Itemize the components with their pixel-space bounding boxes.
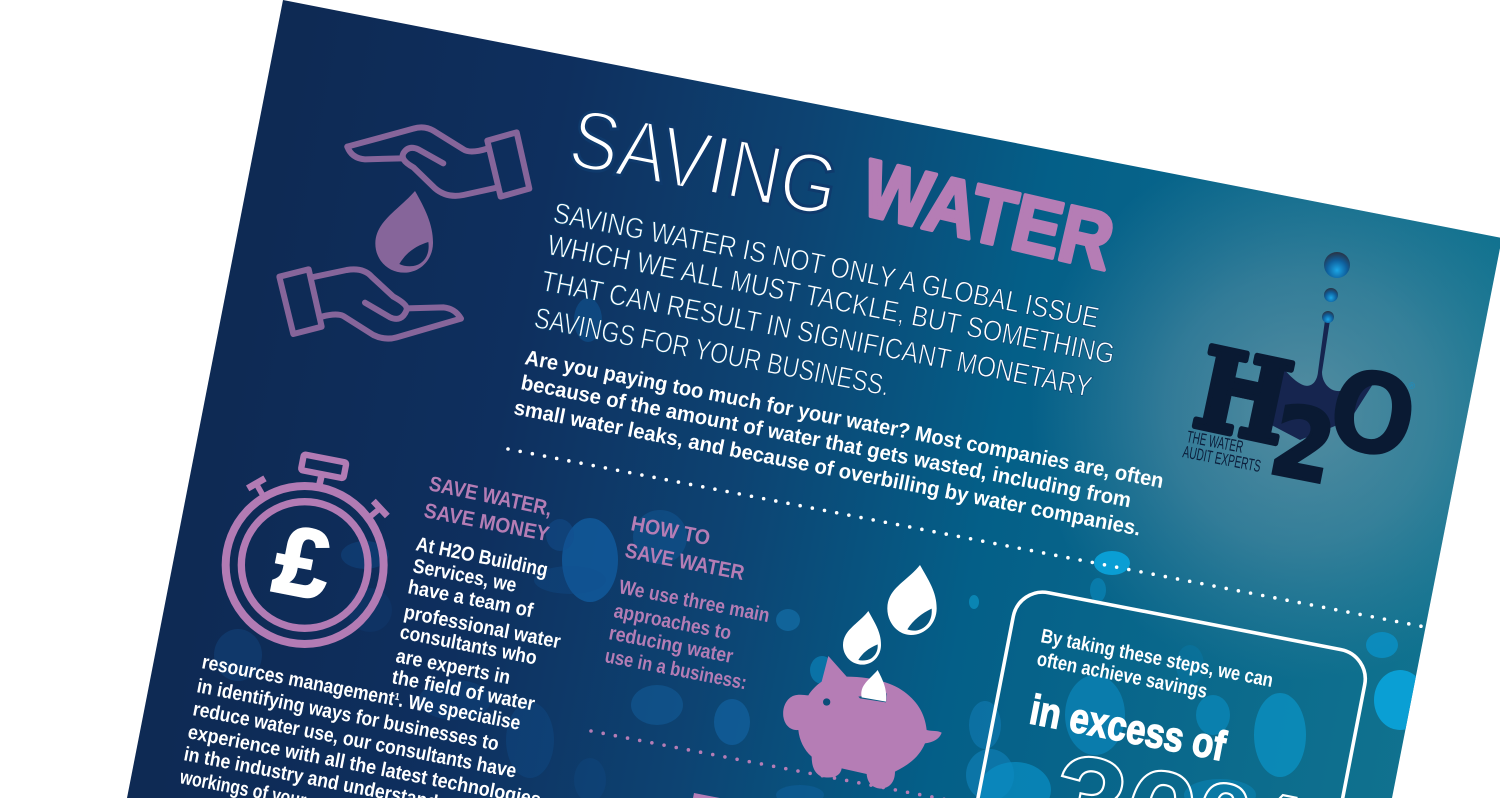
heading: save water, save money: SAVE MONEY	[422, 499, 551, 546]
dotted divider: white	[508, 449, 1425, 627]
intro heading text: SAVINGS FOR YOUR BUSINESS.	[532, 302, 892, 403]
text block: about H2O Building Services: in identifying ways for businesses to	[195, 675, 501, 755]
medium drop	[843, 611, 881, 665]
heading cut off at bottom edge	[691, 793, 733, 798]
callout intro text: often achieve savings	[1035, 648, 1209, 703]
icon: piggy bank with water drops	[783, 565, 942, 789]
intro bold paragraph: Are you paying too much for your water? Most companies are, often	[523, 346, 1165, 493]
text block: about H2O Building Services	[177, 533, 563, 798]
text block: three approaches: reducing water	[607, 622, 735, 668]
icon part: lower hand	[279, 269, 461, 339]
title	[563, 90, 1122, 287]
intro bold paragraph: because of the amount of water that gets wasted, including from	[519, 371, 1133, 512]
logo strapline: THE WATER	[1185, 427, 1245, 457]
callout intro text: By taking these steps, we can	[1039, 625, 1275, 692]
text block: three approaches: We use three main	[617, 576, 771, 627]
text block: three approaches: use in a business:	[603, 645, 749, 694]
water droplet background pattern	[214, 298, 1426, 798]
icon part: water drop	[375, 191, 433, 273]
text block: about H2O Building Services: . We specialise	[397, 690, 522, 735]
icon: stopwatch with pound sign	[226, 454, 387, 644]
title: SAVING	[563, 90, 846, 234]
callout: in excess of: in excess of	[1026, 686, 1230, 770]
intro heading text: THAT CAN RESULT IN SIGNIFICANT MONETARY	[539, 265, 1094, 404]
text block: three approaches: approaches to	[612, 600, 733, 645]
text block: about H2O Building Services: are experts in	[394, 645, 512, 689]
logo strapline: AUDIT EXPERTS	[1181, 442, 1262, 476]
logo strapline	[1181, 427, 1262, 476]
logo: H2O The Water Audit Experts: H	[1184, 323, 1302, 471]
text block: about H2O Building Services: professional water	[402, 601, 563, 653]
heading: how to save water: SAVE WATER	[623, 539, 746, 585]
text block: three approaches	[603, 576, 771, 694]
text block: about H2O Building Services: resources management	[200, 651, 425, 716]
registered mark: ®	[1408, 380, 1416, 391]
text block: about H2O Building Services: have a team of	[406, 576, 535, 622]
intro bold paragraph: small water leaks, and because of overbilling by water companies.	[512, 396, 1143, 541]
dotted divider: pink	[591, 731, 1020, 798]
coin slot	[858, 693, 887, 702]
heading: save water, save money: SAVE WATER,	[427, 472, 554, 521]
heading: how to save water	[623, 512, 746, 585]
logo: H2O The Water Audit Experts: O	[1318, 343, 1427, 487]
drop entering slot	[861, 670, 886, 702]
large drop	[887, 565, 937, 635]
heading: how to save water: HOW TO	[629, 512, 712, 550]
logo: H2O The Water Audit Experts: 2	[1261, 384, 1344, 507]
text block: about H2O Building Services: consultants who	[398, 621, 539, 669]
pound sign: £	[266, 505, 339, 621]
intro heading text	[532, 197, 1117, 404]
piggy eye	[823, 698, 830, 706]
logo letters	[1216, 374, 1279, 405]
intro heading text: WHICH WE ALL MUST TACKLE, BUT SOMETHING	[545, 229, 1117, 371]
title: WATER	[854, 143, 1122, 287]
icon part: upper hand	[347, 127, 529, 197]
text block: about H2O Building Services: Services, we	[411, 555, 518, 597]
intro heading text: SAVING WATER IS NOT ONLY A GLOBAL ISSUE	[551, 197, 1102, 335]
heading: save water, save money	[422, 472, 554, 546]
logo: H2O The Water Audit Experts	[1181, 252, 1427, 507]
piggy bank	[783, 656, 942, 789]
text block: about H2O Building Services: 1	[394, 692, 401, 703]
icon: hands protecting a water drop	[279, 127, 529, 339]
text block: about H2O Building Services: At H2O Building	[414, 533, 550, 582]
logo water drops	[1322, 252, 1350, 323]
text block: about H2O Building Services: reduce water use, our consultants have	[191, 698, 518, 783]
text block: about H2O Building Services: the field of water	[390, 666, 537, 716]
logo blob connecting letters	[1262, 320, 1380, 440]
panel: savings callout box	[939, 587, 1370, 798]
